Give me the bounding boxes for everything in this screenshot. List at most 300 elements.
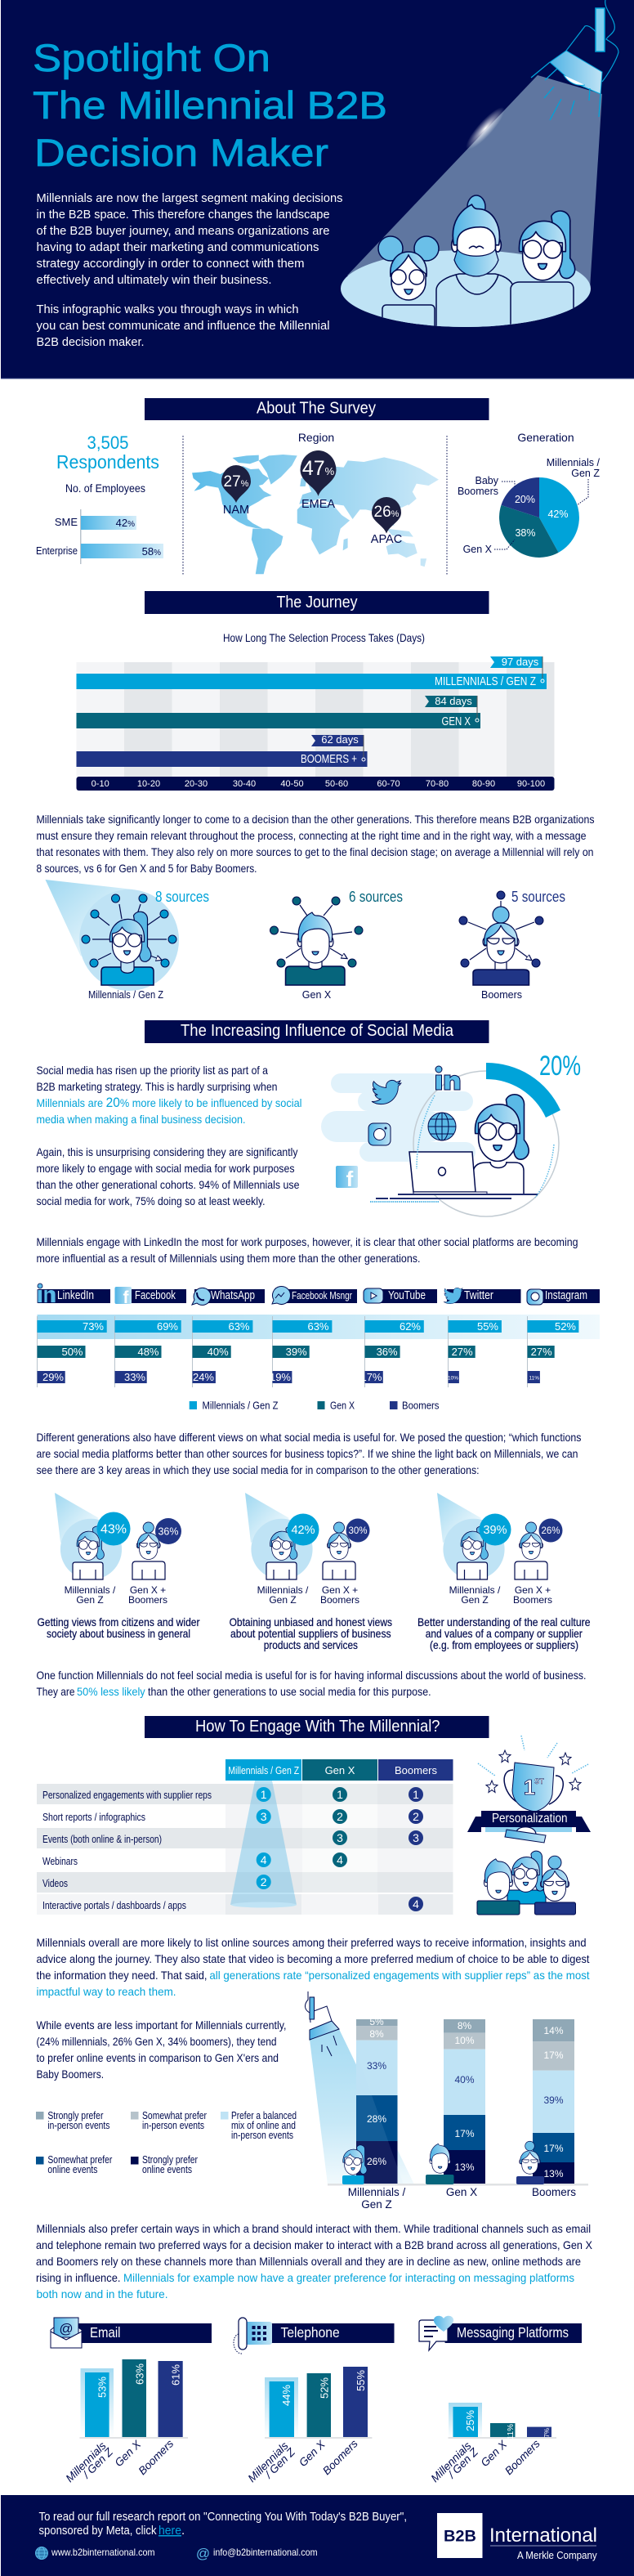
bar chart: 61% xyxy=(170,2364,181,2386)
text: social media intro: Again, this is unsurprising considering they are significantly xyxy=(36,1145,297,1158)
text: events: (24% millennials, 26% Gen X, 34% boomers), they tend xyxy=(36,2035,276,2048)
bar: millennials: 97 days xyxy=(502,656,539,668)
panel: sources boomers: Boomers xyxy=(481,989,522,1001)
title: The Millennial B2B xyxy=(33,83,387,127)
panel: selection process chart: How Long The Selection Process Takes (Days) xyxy=(223,631,425,644)
panel: messaging platforms: Messaging Platforms xyxy=(457,2324,569,2341)
legend: events: in-person events xyxy=(231,2130,293,2141)
panel: sources millennials: Millennials / Gen Z xyxy=(88,989,163,1001)
pin: EMEA xyxy=(301,450,337,511)
rank badges: millennials: 2 xyxy=(261,1875,267,1888)
bar chart: social platforms xyxy=(38,1315,600,1387)
panel: function 3: 39% xyxy=(483,1524,507,1537)
text: online sources: the information they need. That said, xyxy=(36,1969,208,1982)
intro text: having to adapt their marketing and communications xyxy=(36,240,319,254)
row labels xyxy=(42,1790,212,1911)
legend: events: online events xyxy=(47,2164,97,2175)
text: brand interaction: Millennials for example now have a greater preference for interacting on messaging platforms xyxy=(123,2271,574,2284)
panel: telephone: Telephone xyxy=(281,2324,340,2341)
rank badges: boomers: 2 xyxy=(413,1810,419,1823)
contact: email: @ xyxy=(196,2546,210,2561)
axis: 90-100 xyxy=(517,779,545,789)
row labels: Personalized engagements with supplier reps xyxy=(42,1790,212,1801)
panel: generation pie xyxy=(458,431,601,558)
bar: millennials xyxy=(77,656,547,689)
bar: millennials: 33% xyxy=(367,2060,386,2072)
axis: 30-40 xyxy=(233,779,256,789)
rank badges: gen x xyxy=(333,1787,347,1867)
bar: gen x: 84 days xyxy=(435,695,472,707)
panel: generation pie: Generation xyxy=(517,431,574,444)
title: Spotlight On xyxy=(33,36,270,79)
bar: gen x: 17% xyxy=(454,2128,475,2139)
panel: respondents: 3,505 xyxy=(87,432,129,453)
text: events: to prefer online events in comparison to Gen X'ers and xyxy=(36,2051,279,2064)
woman right xyxy=(511,211,575,331)
rank badges: millennials xyxy=(257,1787,271,1889)
panel: region map: Region xyxy=(298,431,334,444)
platform: whatsapp: WhatsApp xyxy=(211,1289,255,1302)
bar chart: / Gen Z xyxy=(262,2445,297,2481)
pin: APAC: 26% xyxy=(374,504,400,521)
row labels: Events (both online & in-person) xyxy=(42,1834,162,1845)
panel: function 2: Millennials / xyxy=(257,1584,309,1596)
bar: boomers: 39% xyxy=(543,2094,564,2106)
figure: boomer xyxy=(516,2141,544,2184)
text: online sources: impactful way to reach them. xyxy=(36,1985,176,1998)
rank badges: boomers xyxy=(409,1787,423,1911)
pie chart: 42% xyxy=(547,508,569,520)
text: one function xyxy=(36,1669,587,1698)
text: events xyxy=(36,2018,286,2081)
figure: gen x xyxy=(426,2144,454,2184)
bar: millennials: 26% xyxy=(367,2156,386,2167)
axis: 80-90 xyxy=(472,779,495,789)
legend: events: in-person events xyxy=(142,2120,204,2131)
intro text: in the B2B space. This therefore changes the landscape xyxy=(36,208,330,222)
pin: APAC: APAC xyxy=(371,533,402,546)
bar: boomers: 62 days xyxy=(321,733,359,746)
bar: gen x: 10% xyxy=(454,2035,475,2046)
icon: personalization trophy: 1 xyxy=(524,1775,535,1799)
pin: EMEA: 47% xyxy=(302,457,335,480)
icon: envelope xyxy=(51,2318,82,2348)
row: boomers: 19% xyxy=(270,1371,291,1383)
panel: function 3: Gen Z xyxy=(461,1594,489,1606)
axis: 70-80 xyxy=(426,779,449,789)
text: function captions: about potential suppliers of business xyxy=(230,1627,391,1640)
bar chart: 7% xyxy=(543,2428,551,2438)
row: millennials: 73% xyxy=(83,1320,104,1333)
legend: social platforms xyxy=(190,1400,440,1411)
table header xyxy=(225,1759,453,1781)
bar: millennials: 28% xyxy=(367,2113,386,2125)
bar chart: Millennials xyxy=(64,2439,109,2484)
legend: social platforms: Boomers xyxy=(402,1400,440,1411)
row: boomers: 17% xyxy=(360,1371,382,1383)
platform: linkedin xyxy=(38,1284,110,1303)
axis: 60-70 xyxy=(377,779,400,789)
bar: millennials: 8% xyxy=(369,2028,384,2040)
platform: twitter xyxy=(444,1288,521,1304)
footer call to action xyxy=(39,2510,407,2538)
text: brand interaction: rising in influence. xyxy=(36,2271,121,2284)
logo: b2b international: B2B xyxy=(444,2528,476,2546)
panel: function 1: Gen X + xyxy=(130,1584,166,1596)
platform: instagram xyxy=(527,1289,600,1305)
bar chart: 55% xyxy=(355,2370,367,2391)
panel: sources gen x: Gen X xyxy=(302,989,332,1001)
row: gen x: 27% xyxy=(531,1346,552,1358)
logo: b2b international: A Merkle Company xyxy=(517,2549,597,2561)
row: gen x: 50% xyxy=(61,1346,83,1358)
figure: millennial xyxy=(342,2145,367,2184)
bar chart: 53% xyxy=(96,2377,108,2398)
text: brand interaction: both now and in the future. xyxy=(36,2287,168,2300)
bar chart: Gen X xyxy=(113,2438,144,2469)
heading: the journey: The Journey xyxy=(276,594,358,612)
bar chart: / Gen Z xyxy=(445,2445,480,2481)
employee bars xyxy=(36,509,163,564)
legend: events: mix of online and xyxy=(231,2120,296,2131)
bar chart: Boomers xyxy=(320,2437,360,2477)
panel: function 2: Gen X + xyxy=(322,1584,358,1596)
panel: respondents xyxy=(36,432,163,564)
panel: telephone xyxy=(234,2318,394,2484)
pin: NAM: NAM xyxy=(223,504,249,517)
axis labels: Gen X xyxy=(446,2186,477,2198)
platform: instagram: Instagram xyxy=(545,1289,587,1302)
row labels: Videos xyxy=(42,1878,68,1889)
pie chart: 38% xyxy=(515,527,536,539)
icon: chat bubble xyxy=(419,2316,453,2350)
panel: generation pie: Millennials / xyxy=(547,457,601,468)
panel: function 1 xyxy=(55,1493,181,1606)
row: boomers: 33% xyxy=(124,1371,145,1383)
pin: NAM xyxy=(221,465,251,517)
panel: platform headers xyxy=(38,1284,600,1307)
row: millennials: 69% xyxy=(157,1320,178,1333)
bar chart: Gen X xyxy=(297,2438,328,2469)
row: gen x: 48% xyxy=(137,1346,159,1358)
axis: 20-30 xyxy=(185,779,208,789)
panel: function 1: Boomers xyxy=(128,1594,167,1606)
intro text: Millennials are now the largest segment making decisions xyxy=(36,191,343,205)
lens flare xyxy=(462,103,509,154)
logo: b2b international xyxy=(437,2513,597,2561)
panel: sources gen x xyxy=(270,889,403,1001)
legend: events: in-person events xyxy=(47,2120,109,2131)
bar chart: 63% xyxy=(134,2363,145,2385)
axis: 40-50 xyxy=(280,779,304,789)
panel: sources millennials xyxy=(46,880,209,1001)
legend: events xyxy=(36,2110,297,2175)
intro text xyxy=(36,191,343,349)
legend: events: Strongly prefer xyxy=(47,2110,103,2121)
row: gen x: 39% xyxy=(286,1346,307,1358)
text: linkedin statement: more influential as a result of Millennials using them more than the other generations. xyxy=(36,1252,420,1265)
footer call to action: sponsored by Meta, click xyxy=(39,2524,157,2538)
20% arc xyxy=(486,1063,560,1118)
intro text: you can best communicate and influence the Millennial xyxy=(36,319,330,333)
axis labels xyxy=(348,2186,576,2211)
text: function captions: products and services xyxy=(264,1638,358,1651)
intro text: strategy accordingly in order to connect with them xyxy=(36,257,304,271)
row: millennials: 62% xyxy=(400,1320,421,1333)
platform: facebook: f xyxy=(123,1288,129,1307)
icon: facebook xyxy=(336,1166,358,1191)
rank badges: boomers: 4 xyxy=(413,1897,419,1911)
text: social media intro: media when making a final business decision. xyxy=(36,1113,245,1126)
bar chart xyxy=(246,2367,372,2484)
icon: instagram xyxy=(368,1123,391,1145)
row: millennials xyxy=(38,1320,578,1333)
text: function captions xyxy=(38,1615,591,1651)
light pool xyxy=(341,250,591,327)
panel: sources boomers: 5 sources xyxy=(511,889,565,905)
row: millennials: 63% xyxy=(228,1320,250,1333)
contact: website: www.b2binternational.com xyxy=(51,2547,155,2558)
text: different views xyxy=(36,1431,582,1476)
bar chart: Boomers xyxy=(502,2437,542,2477)
panel: function 2 xyxy=(245,1493,369,1606)
bar chart: 25% xyxy=(464,2410,476,2431)
spotlight column beam xyxy=(230,1781,297,1908)
axis labels: Millennials / xyxy=(348,2186,406,2198)
row: boomers: 24% xyxy=(193,1371,214,1383)
contact: email xyxy=(196,2546,317,2561)
bar chart xyxy=(64,2359,188,2484)
pin: APAC xyxy=(371,497,402,546)
stat: 20% xyxy=(539,1051,581,1082)
platform: linkedin: LinkedIn xyxy=(57,1289,94,1302)
text: different views: see there are 3 key areas in which they use social media for in comparison to the other generations: xyxy=(36,1463,479,1476)
row labels: Webinars xyxy=(42,1856,78,1867)
employee bars: 42% xyxy=(116,517,135,529)
row: boomers: 10% xyxy=(448,1375,458,1382)
row labels: Short reports / infographics xyxy=(42,1812,145,1823)
bar: millennials: 5% xyxy=(369,2016,384,2027)
panel: function 2: 42% xyxy=(291,1524,315,1537)
legend: events: online events xyxy=(142,2164,192,2175)
text: online sources: advice along the journey. They also state that video is becoming a more preferred medium of choice to be able to digest xyxy=(36,1952,590,1965)
panel: footer xyxy=(1,2495,634,2576)
text: online sources xyxy=(36,1936,590,1998)
panel: respondents: No. of Employees xyxy=(65,482,145,495)
panel: function 2: Boomers xyxy=(320,1594,359,1606)
bar: gen x xyxy=(444,2019,485,2184)
panel: function 3: Millennials / xyxy=(449,1584,501,1596)
row: boomers: 29% xyxy=(42,1371,64,1383)
footer call to action: here xyxy=(158,2524,181,2538)
icon: envelope: @ xyxy=(59,2321,74,2336)
bar chart: Millennials xyxy=(429,2439,474,2484)
platform: messenger xyxy=(272,1286,357,1304)
platform: youtube xyxy=(364,1288,437,1303)
rank badges: millennials: 1 xyxy=(261,1788,267,1801)
heading: about the survey: About The Survey xyxy=(257,399,376,417)
text: brand interaction: and telephone remain two preferred ways for a decision maker to interact with a B2B brand across all generations, Gen X xyxy=(36,2238,593,2251)
icon: facebook: f xyxy=(346,1167,354,1191)
bar chart: / Gen Z xyxy=(80,2445,115,2481)
panel: respondents: Respondents xyxy=(56,451,159,473)
panel: sources boomers xyxy=(459,889,565,1001)
table: engagement rankings xyxy=(37,1759,453,1915)
bar: gen x: GEN X xyxy=(441,715,471,728)
panel: messaging platforms xyxy=(419,2316,582,2484)
bar: millennials xyxy=(356,2016,404,2184)
panel: generation pie: Baby xyxy=(476,475,499,486)
text: linkedin statement: Millennials engage with LinkedIn the most for work purposes, however, it is clear that other social platforms are becoming xyxy=(36,1235,578,1248)
icon: personalization trophy xyxy=(467,1736,591,1843)
panel: hero xyxy=(1,0,634,379)
bar: gen x: 40% xyxy=(454,2074,475,2085)
panel: sources gen x: 6 sources xyxy=(349,889,403,905)
row: gen x: 40% xyxy=(208,1346,229,1358)
child left xyxy=(378,236,439,331)
intro text: This infographic walks you through ways in which xyxy=(36,302,299,316)
panel: generation pie: Boomers xyxy=(458,486,498,497)
icon: chart lamp xyxy=(305,1991,339,2056)
pin: NAM: 27% xyxy=(224,473,249,491)
text: online sources: all generations rate “personalized engagements with supplier reps” as the most xyxy=(209,1969,590,1982)
text: function captions: and values of a company or supplier xyxy=(426,1627,583,1640)
text: social media intro: than the other generational cohorts. 94% of Millennials use xyxy=(36,1178,300,1191)
bar: boomers: 13% xyxy=(543,2168,564,2180)
text: social media intro: B2B marketing strategy. This is hardly surprising when xyxy=(36,1080,278,1093)
legend: events: Prefer a balanced xyxy=(231,2110,297,2121)
icon: personalization trophy: ST xyxy=(534,1777,544,1785)
text: one function: 50% less likely xyxy=(77,1685,145,1698)
panel: selection process chart xyxy=(77,631,554,791)
bar chart: Millennials xyxy=(246,2439,291,2484)
icon: globe xyxy=(428,1113,456,1140)
employee bars: 58% xyxy=(142,545,161,558)
illustration: social media woman xyxy=(321,1051,581,1216)
text: events: While events are less important for Millennials currently, xyxy=(36,2018,286,2032)
axis labels: Gen Z xyxy=(361,2198,392,2211)
text: brand interaction xyxy=(36,2222,593,2300)
row: millennials: 52% xyxy=(555,1320,576,1333)
woman figure xyxy=(473,1095,529,1195)
table header: Millennials / Gen Z xyxy=(228,1764,299,1776)
rank badges: gen x: 3 xyxy=(337,1831,343,1844)
text: events: Baby Boomers. xyxy=(36,2068,104,2081)
bar: boomers xyxy=(77,733,368,767)
text: brand interaction: and Boomers rely on these channels more than Millennials overall and they are in decline as new, online methods are xyxy=(36,2255,581,2268)
rank badges: gen x: 2 xyxy=(337,1810,343,1823)
bar: boomers: 17% xyxy=(543,2050,564,2061)
platform: twitter: Twitter xyxy=(464,1289,493,1302)
row: millennials: 63% xyxy=(307,1320,329,1333)
laptop xyxy=(409,1152,487,1194)
contact: email: info@b2binternational.com xyxy=(213,2547,317,2558)
row: boomers: 11% xyxy=(529,1375,539,1382)
panel: function 1: 36% xyxy=(158,1525,179,1537)
heading: how to engage: How To Engage With The Millennial? xyxy=(195,1718,440,1736)
bar chart: Gen X xyxy=(479,2438,510,2469)
panel: generation pie: Gen X xyxy=(463,544,493,555)
panel: email: Email xyxy=(90,2324,121,2341)
icon: personalization trophy: Personalization xyxy=(492,1812,567,1826)
row: gen x: 27% xyxy=(452,1346,473,1358)
rank badges: boomers: 1 xyxy=(413,1788,419,1801)
bar chart: Boomers xyxy=(136,2437,176,2477)
intro text: effectively and ultimately win their business. xyxy=(36,273,271,287)
panel: function 3: 26% xyxy=(541,1526,560,1536)
icon: stage lamp xyxy=(531,0,618,120)
bar: gen x: 13% xyxy=(454,2162,475,2173)
panel: generation pie: Gen Z xyxy=(571,468,600,479)
world map xyxy=(192,455,439,574)
panel: function 1: 43% xyxy=(100,1522,127,1537)
man xyxy=(436,195,514,331)
chart columns xyxy=(77,662,554,777)
panel: email xyxy=(51,2318,212,2484)
axis labels: Boomers xyxy=(532,2186,576,2198)
text: social media intro: Millennials are 20% more likely to be influenced by social xyxy=(36,1095,302,1110)
bar chart: 52% xyxy=(319,2377,330,2399)
pie chart xyxy=(499,477,579,558)
heading: about the survey xyxy=(145,398,489,420)
panel: function 3: Boomers xyxy=(513,1594,552,1606)
rank badges: millennials: 3 xyxy=(261,1810,267,1823)
text: social media intro: Social media has risen up the priority list as part of a xyxy=(36,1064,268,1077)
heading: social media xyxy=(145,1020,489,1043)
bar chart: 11% xyxy=(507,2424,516,2439)
text: social media intro: more likely to engage with social media for work purposes xyxy=(36,1162,294,1175)
bar: boomers: 14% xyxy=(543,2025,564,2036)
text: online sources: Millennials overall are more likely to list online sources among their preferred ways to receive information, insights and xyxy=(36,1936,587,1949)
platform: facebook: Facebook xyxy=(135,1289,176,1302)
bar: gen x xyxy=(77,695,480,728)
platform: youtube: YouTube xyxy=(388,1289,426,1302)
text: journey summary: 8 sources, vs 6 for Gen X and 5 for Baby Boomers. xyxy=(36,862,257,875)
platform: whatsapp xyxy=(192,1288,265,1305)
panel: function 1: Gen Z xyxy=(76,1594,104,1606)
heading: social media: The Increasing Influence of Social Media xyxy=(181,1022,454,1040)
heading: how to engage xyxy=(145,1716,489,1738)
platform: facebook xyxy=(114,1287,186,1307)
text: brand interaction: Millennials also prefer certain ways in which a brand should interact with them. While traditional channels such as email xyxy=(36,2222,591,2235)
panel: function 3: Gen X + xyxy=(515,1584,551,1596)
table rows xyxy=(37,1784,453,1915)
panel: function 2: Gen Z xyxy=(269,1594,297,1606)
bar: millennials: MILLENNIALS / GEN Z xyxy=(435,674,536,688)
panel: function 1: Millennials / xyxy=(65,1584,116,1596)
logo: b2b international: International xyxy=(489,2524,597,2547)
legend: events: Somewhat prefer xyxy=(47,2154,112,2166)
title: Decision Maker xyxy=(34,131,328,174)
text: one function: They are xyxy=(36,1685,75,1698)
legend: social platforms: Millennials / Gen Z xyxy=(203,1400,279,1411)
footer call to action: . xyxy=(181,2524,185,2538)
spotlight beam xyxy=(347,75,602,289)
table header: Boomers xyxy=(395,1764,438,1776)
heading: the journey xyxy=(145,591,489,614)
pie chart: 20% xyxy=(515,494,535,505)
pin: EMEA: EMEA xyxy=(301,498,335,511)
legend: events: Strongly prefer xyxy=(142,2154,198,2166)
panel: sources millennials: 8 sources xyxy=(155,889,209,905)
chart: event preferences xyxy=(305,1991,588,2211)
panel: function 3 xyxy=(437,1493,562,1606)
text: function captions: Obtaining unbiased and honest views xyxy=(230,1615,392,1628)
legend: social platforms: Gen X xyxy=(330,1400,355,1411)
legend: events: Somewhat prefer xyxy=(142,2110,207,2121)
icon: twitter xyxy=(372,1080,401,1104)
table header: Gen X xyxy=(325,1764,355,1776)
